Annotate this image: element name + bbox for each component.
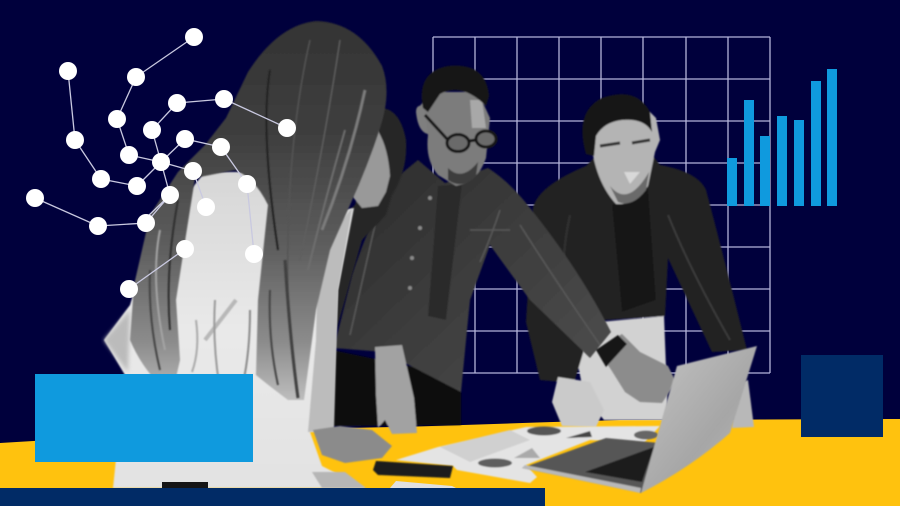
laptop [522,346,757,493]
far hand [732,380,754,428]
forearm and hand [375,345,417,434]
laptop base [522,438,660,493]
grid panel [433,37,770,373]
person: centre man [331,66,676,434]
hair strands [150,40,365,398]
shirt [334,160,611,392]
navy bottom bar [0,488,545,506]
neck and face [418,92,490,186]
belt [162,482,208,488]
papers on table [396,426,660,483]
glasses [425,115,496,152]
watch [596,335,627,367]
network diagram [26,28,296,298]
hair [422,66,489,112]
hair [130,21,387,400]
hands [313,426,392,463]
near hand [552,377,604,427]
person: woman with long hair [104,21,392,488]
pie charts [527,426,561,436]
shirt [526,150,747,383]
yellow table [0,419,900,506]
phone [373,461,453,478]
jacket shoulder shadow [104,310,130,372]
cream scarf [308,208,352,432]
hair strands on jacket [192,300,250,400]
laptop lid [641,346,757,493]
person: right man [526,94,754,428]
person: second woman [332,108,406,345]
tablet [390,481,456,488]
keyboard [585,447,654,482]
neck and face [590,108,660,204]
hair [582,94,652,156]
trousers [331,350,461,426]
trousers [574,316,668,420]
blue rectangle [35,374,253,462]
bar chart [727,69,837,206]
jacket [104,172,365,488]
navy square [801,355,883,437]
